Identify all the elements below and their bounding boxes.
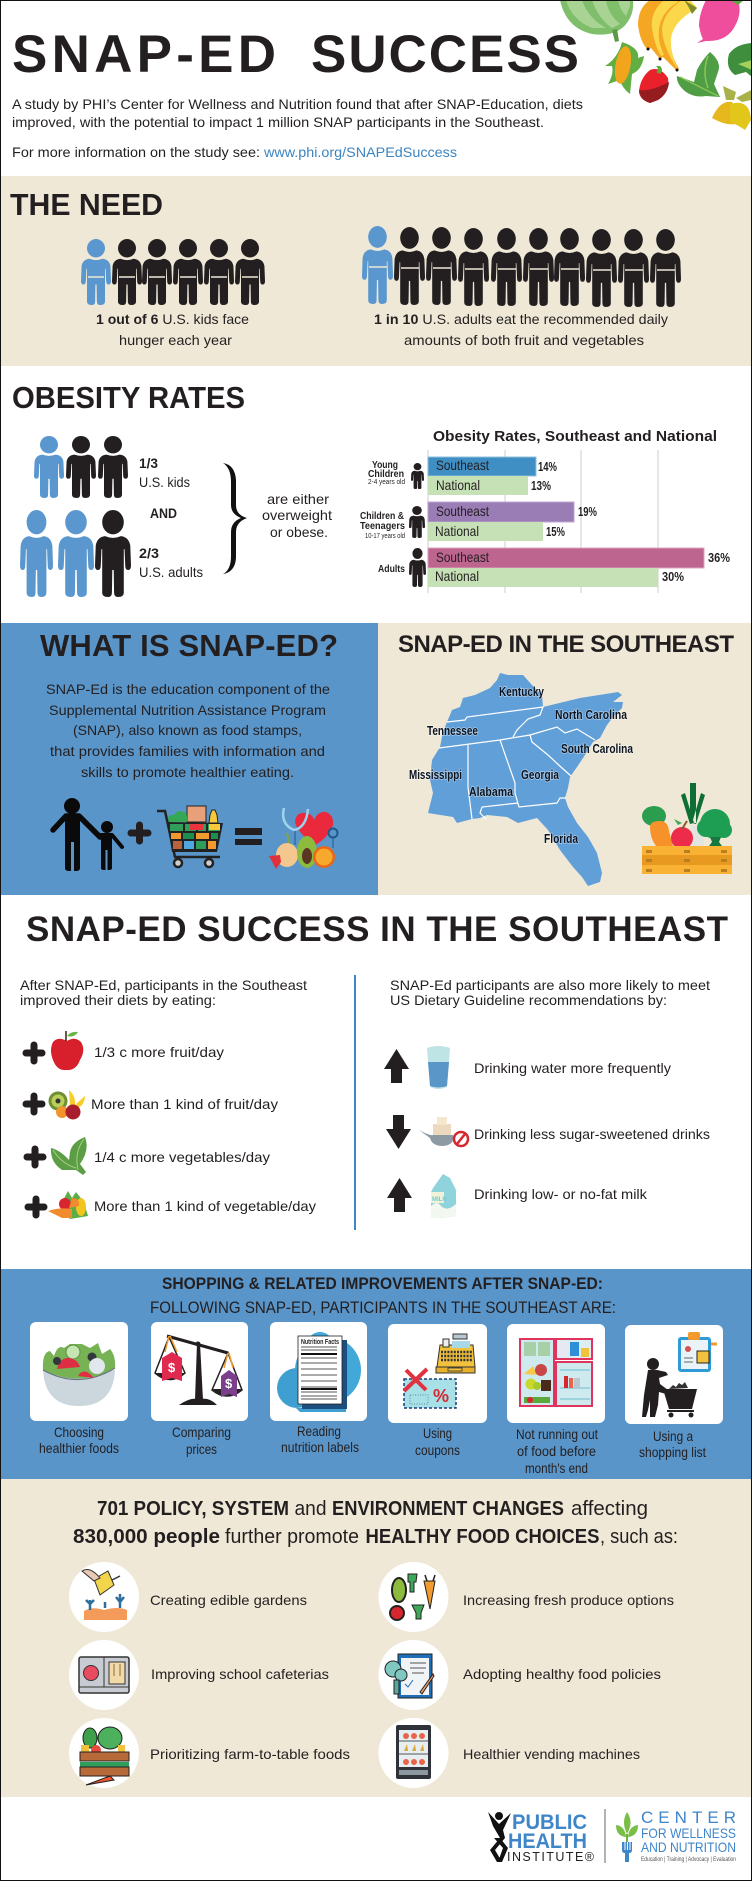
label <box>172 1424 231 1457</box>
description: that provides families with information and <box>50 743 325 759</box>
intro text: A study by PHI’s Center for Wellness and Nutrition found that after SNAP-Education, diets <box>12 96 583 112</box>
bar chart: obesity rates southeast and national: 15% <box>546 524 565 539</box>
item: more than 1 kind of fruit <box>26 1090 278 1120</box>
card: reading nutrition labels: Nutrition Facts <box>301 1339 339 1346</box>
text: diet improvements intro: After SNAP-Ed, participants in the Southeast <box>20 977 307 993</box>
logo: center for wellness and nutrition: CENTER <box>641 1808 736 1827</box>
map: southeastern states: Georgia <box>521 768 560 782</box>
logo: public health institute: INSTITUTE® <box>507 1850 595 1864</box>
icon: shopping cart <box>157 806 223 867</box>
label: healthier foods <box>39 1440 119 1456</box>
label: Healthier vending machines <box>463 1746 640 1762</box>
description: (SNAP), also known as food stamps, <box>73 722 302 738</box>
bar chart: obesity rates southeast and national: Children & <box>360 511 404 522</box>
label: Adopting healthy food policies <box>463 1666 661 1682</box>
card: not running out of food <box>507 1324 605 1476</box>
label: Not running out <box>516 1426 598 1442</box>
label: month's end <box>525 1460 588 1476</box>
label: Using a <box>653 1428 693 1444</box>
pictogram: 1 of 6 kids <box>81 239 265 305</box>
label <box>39 1424 119 1456</box>
label: nutrition labels <box>281 1439 359 1455</box>
heading: and <box>294 1498 326 1520</box>
text: adults fruit and vegetables <box>374 311 668 348</box>
heading: affecting <box>571 1498 648 1520</box>
bar chart: obesity rates southeast and national: Southeast <box>436 457 489 473</box>
card: reading nutrition labels <box>270 1322 367 1455</box>
text: overweight or obese: overweight <box>262 507 332 523</box>
bar chart: obesity rates southeast and national: Children <box>368 469 404 480</box>
heading: snap-ed success in the southeast: SNAP-ED SUCCESS IN THE SOUTHEAST <box>26 910 728 949</box>
text: guideline intro <box>390 977 710 1008</box>
heading <box>73 1498 678 1548</box>
item: prioritizing farm-to-table <box>69 1718 350 1788</box>
bar chart: obesity rates southeast and national <box>360 428 730 593</box>
item: more than 1 kind of fruit: More than 1 kind of fruit/day <box>91 1096 278 1112</box>
logo: center for wellness and nutrition <box>616 1808 736 1863</box>
title: SNAP-ED <box>12 25 276 84</box>
card: choosing healthier foods <box>30 1322 128 1456</box>
map: southeastern states: Kentucky <box>499 685 544 699</box>
panel: policy, system and environment changes <box>0 1479 752 1797</box>
bar chart: obesity rates southeast and national: 14% <box>538 459 557 474</box>
map: southeastern states: Florida <box>544 832 579 846</box>
text: 1/3 U.S. kids <box>139 455 190 490</box>
item: healthier vending machines <box>378 1718 640 1788</box>
label <box>639 1428 706 1460</box>
heading: ENVIRONMENT CHANGES <box>332 1498 564 1520</box>
chart title: Obesity Rates, Southeast and National <box>433 428 717 445</box>
icon: vegetable crate <box>642 783 732 874</box>
label: shopping list <box>639 1444 706 1460</box>
item: more than 1 kind of vegetable <box>28 1191 316 1219</box>
label <box>281 1423 359 1455</box>
text: kids hunger: 1 out of 6 U.S. kids face <box>96 311 249 327</box>
heading: , such as: <box>600 1526 678 1548</box>
map: southeastern states: South Carolina <box>561 742 634 756</box>
panel: shopping improvements <box>0 1269 752 1479</box>
pictogram: 2/3 adults <box>20 510 131 597</box>
title: SUCCESS <box>311 25 579 84</box>
item: improving school cafeterias <box>69 1640 329 1710</box>
text: overweight or obese: or obese. <box>270 524 328 540</box>
logo: public health institute: PUBLIC <box>512 1811 587 1834</box>
text: overweight or obese <box>262 491 332 540</box>
bar chart: obesity rates southeast and national: Young <box>372 460 398 471</box>
item: 1/4 c more vegetables <box>27 1137 270 1175</box>
description: skills to promote healthier eating. <box>81 764 294 780</box>
label: Reading <box>297 1423 341 1439</box>
logo: center for wellness and nutrition: FOR WELLNESS <box>641 1825 736 1841</box>
description: Supplemental Nutrition Assistance Program <box>49 702 326 718</box>
label: coupons <box>415 1442 460 1458</box>
brace <box>223 463 247 574</box>
heading: 701 POLICY, SYSTEM <box>97 1498 289 1520</box>
bar chart: obesity rates southeast and national: Southeast <box>436 503 489 519</box>
icon: heart and healthy foods <box>269 808 338 869</box>
label <box>516 1426 598 1476</box>
map: southeastern states: Alabama <box>469 785 514 799</box>
logo: public health institute <box>488 1811 595 1864</box>
map: southeastern states: North Carolina <box>555 708 628 722</box>
bar chart: obesity rates southeast and national: 13% <box>531 478 551 493</box>
text: diet improvements intro: improved their diets by eating: <box>20 992 216 1008</box>
heading: obesity rates: OBESITY RATES <box>12 380 245 415</box>
text: 2/3 U.S. adults: U.S. adults <box>139 564 203 580</box>
panel: the need <box>0 176 752 366</box>
item: drinking water: Drinking water more frequently <box>474 1060 671 1076</box>
card: comparing prices: $ <box>225 1376 233 1391</box>
bar chart: obesity rates southeast and national: National <box>435 568 479 584</box>
icon: plus <box>131 825 148 841</box>
map: southeastern states: Mississippi <box>409 768 462 782</box>
panel: snap-ed in the southeast <box>378 623 752 895</box>
icon: equals <box>235 828 262 845</box>
description <box>46 681 330 780</box>
heading: WHAT IS SNAP-ED? <box>40 628 338 663</box>
intro text: www.phi.org/SNAPEdSuccess <box>263 144 457 160</box>
text: and: AND <box>150 505 177 521</box>
map: southeastern states <box>409 673 634 886</box>
item: creating edible gardens <box>69 1562 307 1632</box>
icon: parent and child <box>53 798 122 871</box>
intro text: improved, with the potential to impact 1 million SNAP participants in the Southeast. <box>12 114 544 130</box>
label: Comparing <box>172 1424 231 1440</box>
text: 1/3 U.S. kids: U.S. kids <box>139 474 190 490</box>
title <box>12 25 579 84</box>
item: drinking low-fat milk <box>387 1174 648 1218</box>
item: 1/3 c more fruit <box>26 1031 224 1070</box>
bar chart: obesity rates southeast and national: 36% <box>708 550 730 565</box>
heading: further promote <box>225 1526 359 1548</box>
pictogram: 1 of 10 adults <box>362 226 681 307</box>
label: of food before <box>517 1443 596 1459</box>
label: Increasing fresh produce options <box>463 1592 674 1608</box>
heading: the need: THE NEED <box>10 187 163 222</box>
bar chart: obesity rates southeast and national: Southeast <box>436 549 489 565</box>
item: drinking less sugar: Drinking less sugar-sweetened drinks <box>474 1126 710 1142</box>
bar chart: obesity rates southeast and national: National <box>436 477 480 493</box>
item: drinking low-fat milk: Drinking low- or no-fat milk <box>474 1186 648 1202</box>
item: adopting healthy food policies <box>378 1640 661 1710</box>
item: increasing fresh produce <box>378 1562 674 1632</box>
panel: what is snap-ed <box>0 623 378 895</box>
bar chart: obesity rates southeast and national: 19% <box>578 504 597 519</box>
logo: center for wellness and nutrition: AND NUTRITION <box>641 1839 736 1855</box>
text: overweight or obese: are either <box>267 491 329 507</box>
item: 1/3 c more fruit: 1/3 c more fruit/day <box>94 1044 224 1060</box>
card: comparing prices <box>151 1322 248 1457</box>
text: kids hunger: hunger each year <box>119 332 232 348</box>
map: southeastern states: Tennessee <box>427 724 478 738</box>
intro text <box>12 96 583 160</box>
logo: public health institute: HEALTH <box>508 1830 587 1853</box>
bar chart: obesity rates southeast and national: Teenagers <box>360 521 405 532</box>
bar chart: obesity rates southeast and national: National <box>435 523 479 539</box>
bar chart: obesity rates southeast and national: Adults <box>378 564 405 575</box>
text: 2/3 U.S. adults <box>139 545 203 580</box>
text: adults fruit and vegetables: 1 in 10 U.S. adults eat the recommended daily <box>374 311 668 327</box>
label <box>415 1425 460 1458</box>
heading: SNAP-ED IN THE SOUTHEAST <box>398 631 734 658</box>
text: guideline intro: US Dietary Guideline recommendations by: <box>390 992 667 1008</box>
text: guideline intro: SNAP-Ed participants are also more likely to meet <box>390 977 710 993</box>
text: 1/3 U.S. kids: 1/3 <box>139 455 158 471</box>
text: diet improvements intro <box>20 977 307 1008</box>
heading: HEALTHY FOOD CHOICES <box>366 1526 600 1548</box>
heading: SHOPPING & RELATED IMPROVEMENTS AFTER SNAP-ED: <box>162 1274 603 1293</box>
text: 2/3 U.S. adults: 2/3 <box>139 545 159 561</box>
description: SNAP-Ed is the education component of the <box>46 681 330 697</box>
card: using a shopping list <box>625 1325 723 1460</box>
item: more than 1 kind of vegetable: More than 1 kind of vegetable/day <box>94 1198 316 1214</box>
item: 1/4 c more vegetables: 1/4 c more vegetables/day <box>94 1149 270 1165</box>
pictogram: 1/3 kids <box>34 436 128 498</box>
label: Creating edible gardens <box>150 1592 307 1608</box>
item: drinking less sugar <box>386 1115 710 1149</box>
label: prices <box>186 1441 217 1457</box>
label: Using <box>423 1425 452 1441</box>
label: Improving school cafeterias <box>151 1666 329 1682</box>
bar chart: obesity rates southeast and national: 30% <box>662 569 684 584</box>
text: adults fruit and vegetables: amounts of both fruit and vegetables <box>404 332 644 348</box>
item: drinking water <box>384 1046 671 1089</box>
illustration: fruits and vegetables <box>560 0 752 130</box>
subheading: FOLLOWING SNAP-ED, PARTICIPANTS IN THE SOUTHEAST ARE: <box>150 1298 616 1317</box>
intro text: For more information on the study see: <box>12 144 260 160</box>
label: Prioritizing farm-to-table foods <box>150 1746 350 1762</box>
label: Choosing <box>54 1424 104 1440</box>
bar chart: obesity rates southeast and national: 10-17 years old <box>365 533 405 540</box>
card: using coupons <box>388 1324 487 1458</box>
item: drinking low-fat milk: MILK <box>432 1197 447 1203</box>
text: kids hunger <box>96 311 249 348</box>
card: using coupons: % <box>433 1386 449 1406</box>
bar chart: obesity rates southeast and national: 2-4 years old <box>368 479 405 486</box>
card: comparing prices: $ <box>168 1360 176 1375</box>
heading: 830,000 people <box>73 1526 220 1548</box>
